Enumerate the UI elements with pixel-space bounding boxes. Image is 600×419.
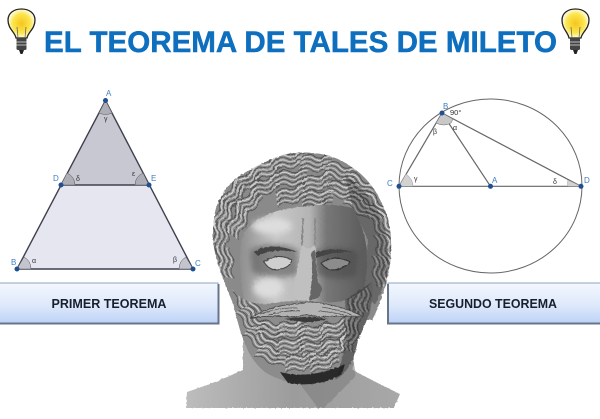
diagram: second theorem circle: 90° xyxy=(450,108,461,117)
diagram: first theorem triangle xyxy=(11,89,201,272)
beard xyxy=(233,282,373,384)
diagram: second theorem circle xyxy=(387,99,590,273)
hair right shadow xyxy=(345,175,388,305)
diagram: second theorem circle: C xyxy=(387,179,393,188)
nose xyxy=(292,245,322,301)
brows xyxy=(254,246,354,258)
portrait: engraved bust of Thales xyxy=(186,149,400,408)
diagram: first theorem triangle: δ xyxy=(76,176,80,183)
left eye xyxy=(264,256,292,270)
diagram: first theorem triangle: ε xyxy=(132,171,135,178)
moustache xyxy=(250,302,362,318)
left cheek highlight xyxy=(253,278,283,298)
diagram: second theorem circle: A xyxy=(492,176,498,185)
eye socket shadows xyxy=(250,244,358,279)
diagram: first theorem triangle: E xyxy=(151,174,156,183)
button: primer teorema: PRIMER TEOREMA xyxy=(52,297,166,311)
diagram: first theorem triangle: β xyxy=(173,257,177,264)
nose shadow xyxy=(309,250,322,301)
diagram: second theorem circle: D xyxy=(584,176,590,185)
diagram: first theorem triangle: A xyxy=(106,89,112,98)
icon: left light bulb xyxy=(8,9,35,54)
diagram: second theorem circle: δ xyxy=(553,179,557,186)
title: EL TEOREMA DE TALES DE MILETO xyxy=(44,26,557,59)
button: segundo teorema: SEGUNDO TEOREMA xyxy=(429,297,557,311)
forehead crease xyxy=(302,218,315,246)
chest fold shading xyxy=(300,350,356,408)
diagram: second theorem circle: γ xyxy=(414,176,418,183)
diagram: second theorem circle: β xyxy=(433,129,437,136)
beard dark chin xyxy=(280,364,345,384)
moustache strands xyxy=(260,307,352,315)
icon: right light bulb xyxy=(562,9,589,54)
diagram: first theorem triangle: C xyxy=(195,259,201,268)
beard curls xyxy=(232,287,372,374)
button: primer teorema xyxy=(0,283,218,324)
hair curls xyxy=(205,149,398,287)
button: segundo teorema xyxy=(388,283,600,324)
chest and shoulders xyxy=(186,335,400,408)
right eye xyxy=(321,258,350,270)
lips xyxy=(285,317,328,322)
beard right shadow xyxy=(335,282,373,380)
diagram: second theorem circle: B xyxy=(443,102,448,111)
diagram: second theorem circle: α xyxy=(453,125,457,132)
diagram: first theorem triangle: D xyxy=(53,174,59,183)
hair mass xyxy=(213,153,391,320)
diagram: first theorem triangle: α xyxy=(32,258,36,265)
diagram: first theorem triangle: γ xyxy=(104,116,108,123)
forehead highlight xyxy=(252,218,292,234)
diagram: first theorem triangle: B xyxy=(11,258,16,267)
face xyxy=(240,205,367,325)
